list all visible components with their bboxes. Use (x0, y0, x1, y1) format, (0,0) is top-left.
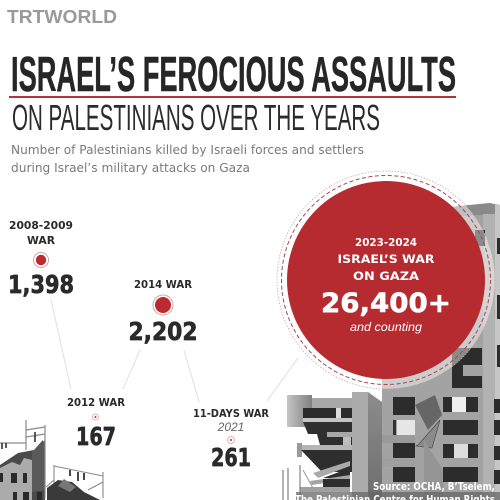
connector lines (51, 300, 298, 402)
red circle: 2023-2024 war on Gaza: 26,400+ (321, 288, 451, 319)
red circle: 2023-2024 war on Gaza: and counting (350, 322, 423, 334)
red circle: 2023-2024 war on Gaza: ON GAZA (353, 269, 419, 283)
timeline entry: 2014 war (128, 278, 198, 346)
red circle: 2023-2024 war on Gaza: 2023-2024 (355, 236, 417, 249)
illustration: bombed tower block (283, 203, 500, 500)
title underline (9, 96, 456, 98)
timeline entry: 2008-2009 war (8, 219, 74, 299)
description (11, 142, 364, 175)
timeline entry: 2008-2009 war: WAR (27, 234, 56, 247)
timeline entry: 2012 war: 2012 WAR (67, 396, 125, 409)
logo: TRT World: TRTWORLD (7, 6, 117, 27)
timeline entry: 2012 war (67, 396, 125, 451)
timeline entry: 2008-2009 war: 2008-2009 (9, 219, 73, 232)
source note (295, 481, 495, 500)
timeline entry: 2014 war: 2,202 (128, 317, 198, 346)
red circle: 2023-2024 war on Gaza: ISRAEL’S WAR (338, 252, 435, 266)
red circle: 2023-2024 war on Gaza (277, 171, 495, 389)
timeline entry: 11-days war (193, 407, 269, 472)
description: during Israel’s military attacks on Gaza (11, 160, 250, 175)
timeline entry: 2014 war: 2014 WAR (134, 278, 192, 291)
timeline entry: 2008-2009 war: 1,398 (8, 270, 74, 299)
timeline entry: 11-days war: 261 (211, 443, 251, 472)
illustration: ruined left building (0, 420, 103, 500)
timeline entry: 2012 war: 167 (76, 422, 116, 451)
timeline entry: 11-days war: 2021 (217, 420, 244, 434)
description: Number of Palestinians killed by Israeli forces and settlers (11, 142, 364, 157)
timeline entry: 11-days war: 11-DAYS WAR (193, 407, 269, 420)
